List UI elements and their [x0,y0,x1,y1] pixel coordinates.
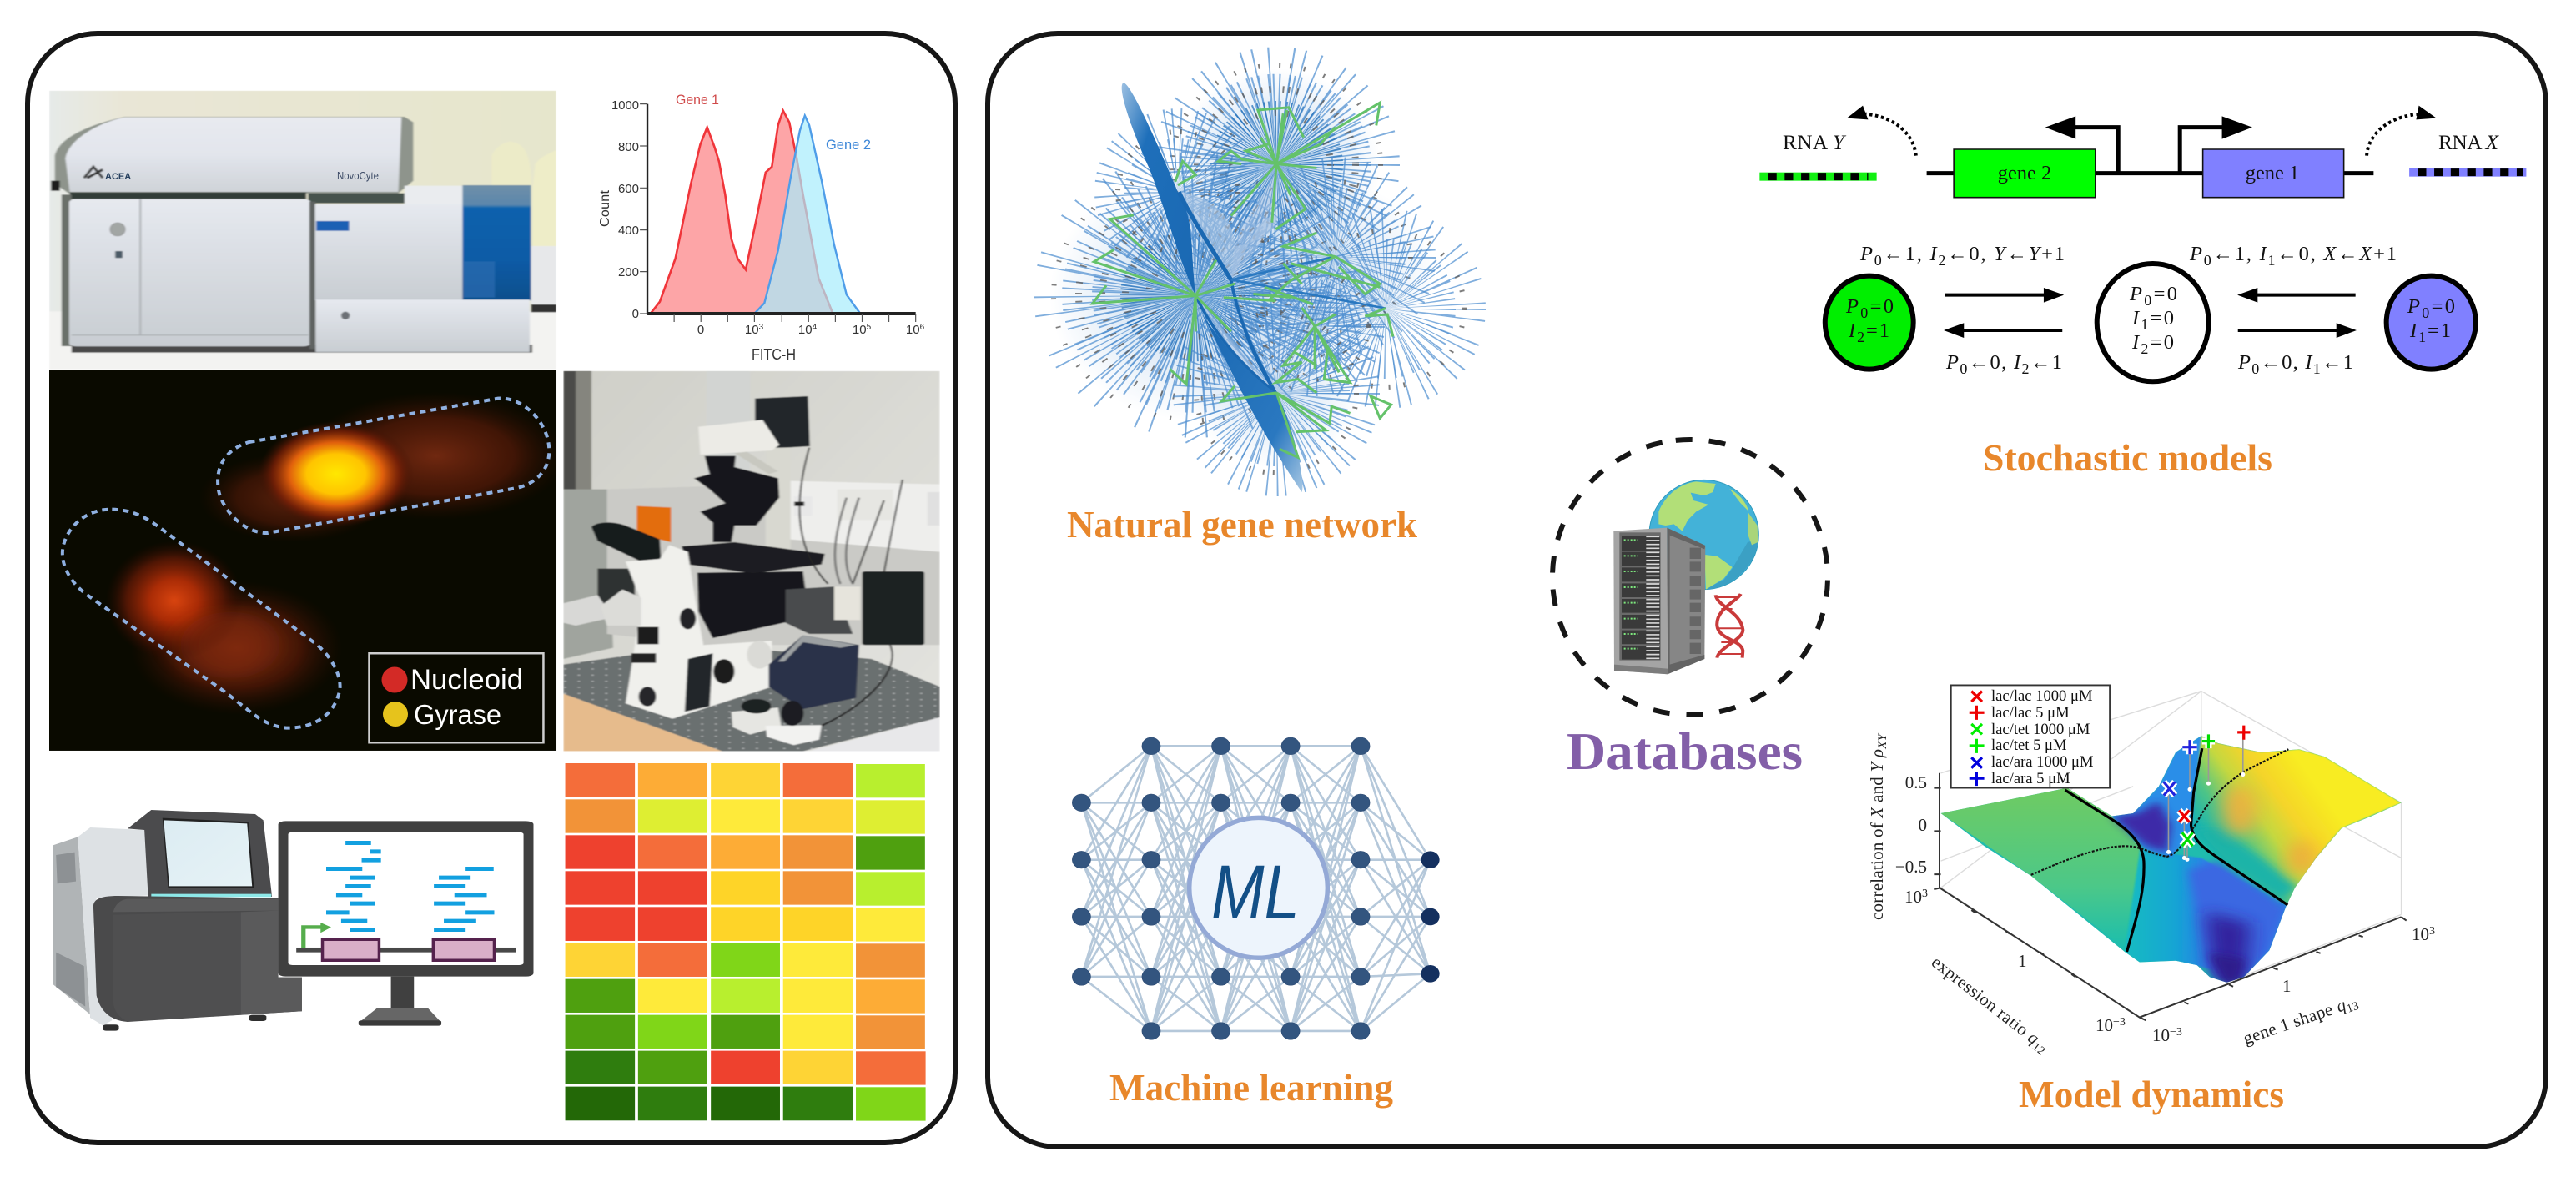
chart: flow cytometry histogram: 6 [920,323,925,332]
chart: natural gene network [1049,65,1464,492]
heading: model dynamics: Model dynamics [2019,1073,2284,1115]
diagram: stochastic gene pair: 0 [2422,304,2429,321]
diagram: stochastic gene pair: 0 [2204,252,2211,269]
chart: 3D correlation surface: 0.5 [1905,772,1927,792]
chart: 3D correlation surface: 12 [2030,1040,2047,1058]
chart: flow cytometry histogram: 3 [759,323,764,332]
diagram: stochastic gene pair: I [2259,243,2268,265]
chart: flow cytometry histogram: FITC-H [752,346,796,363]
diagram: stochastic gene pair: ←0, [1969,351,2013,374]
diagram: stochastic gene pair: gene 1 [2246,162,2299,184]
chart: 3D correlation surface: XY [1876,732,1889,750]
chart: flow cytometry histogram: 400 [618,224,639,238]
photo: inverted microscope [563,371,940,752]
diagram: stochastic gene pair: P [2407,295,2420,318]
chart: flow cytometry histogram: 800 [618,140,639,154]
chart: 3D correlation surface: 1 [2282,976,2291,996]
diagram: stochastic gene pair: RNA X [2438,131,2499,154]
diagram: stochastic gene pair: ←1 [2322,351,2353,374]
diagram: stochastic gene pair: 2 [2022,360,2030,377]
icon: databases globe server and DNA [1539,426,1841,728]
chart: 3D correlation surface: 13 [2345,1000,2361,1016]
diagram: stochastic gene pair: P [2129,283,2142,305]
chart: 3D correlation surface: 10 [1904,887,1922,907]
diagram: neural network [1072,737,1440,1039]
diagram: stochastic gene pair [1759,106,2526,381]
diagram: stochastic gene pair: I [1929,243,1938,265]
diagram: stochastic gene pair: 0 [2251,360,2259,377]
chart: 3D correlation surface: 3 [1922,888,1928,900]
chart: expression heatmap [566,763,926,1121]
chart: 3D correlation surface: lac/ara 5 μM [1991,770,2070,787]
legend: nucleoid and gyrase: Nucleoid [410,664,523,696]
diagram: stochastic gene pair: X←X+1 [2323,243,2397,265]
label: ACEA: ACEA [105,172,131,182]
diagram: stochastic gene pair: RNA Y [1783,131,1847,154]
diagram: stochastic gene pair: ←1 [2030,351,2062,374]
chart: 3D correlation surface: gene 1 shape q [2241,994,2348,1049]
chart: 3D correlation surface: correlation of X and Y ρ [1867,749,1887,920]
chart: flow cytometry histogram: 10 [853,323,867,337]
heading: natural gene network: Natural gene network [1067,503,1417,546]
diagram: stochastic gene pair: 0 [1960,360,1967,377]
diagram: stochastic gene pair: ←1, [1883,243,1929,265]
green interaction edges [1093,103,1393,457]
legend: nucleoid and gyrase [382,664,523,730]
diagram: stochastic gene pair: =0 [2432,295,2455,318]
diagram: stochastic gene pair: P [2189,243,2202,265]
diagram: stochastic gene pair: P [1859,243,1873,265]
chart: flow cytometry histogram: Gene 1 [676,92,719,108]
chart: flow cytometry histogram: Gene 2 [826,137,871,153]
chart: 3D correlation surface: lac/tet 1000 μM [1991,721,2090,738]
diagram: stochastic gene pair: =0 [1870,295,1894,318]
photo: fluorescence micrograph [49,370,566,751]
chart: flow cytometry histogram: 5 [867,323,872,332]
chart: flow cytometry histogram: 10 [906,323,920,337]
diagram: stochastic gene pair: gene 2 [1998,162,2051,184]
diagram: stochastic gene pair: 1 [2141,316,2148,333]
chart: flow cytometry histogram: 10 [745,323,759,337]
diagram: stochastic gene pair: Y←Y+1 [1994,243,2065,265]
chart: 3D correlation surface: −0.5 [1895,857,1927,877]
chart: flow cytometry histogram: 4 [813,323,818,332]
chart: flow cytometry histogram [598,92,925,363]
diagram: stochastic gene pair: 1 [2313,360,2321,377]
chart: flow cytometry histogram: 10 [798,323,813,337]
diagram: stochastic gene pair: I [2409,319,2418,342]
diagram: stochastic gene pair: =1 [2428,319,2451,342]
diagram: stochastic gene pair: 0 [1860,304,1868,321]
blue lens edges [1122,83,1386,492]
diagram: stochastic gene pair: P [1945,351,1959,374]
panel: modelling and data [988,33,2546,1147]
chart: 3D correlation surface: lac/ara 1000 μM [1991,753,2094,771]
diagram: stochastic gene pair: I [2304,351,2313,374]
diagram: stochastic gene pair: 1 [2418,329,2426,345]
chart: 3D correlation surface: lac/tet 5 μM [1991,737,2067,754]
chart: 3D correlation surface: expression ratio q [1928,952,2043,1049]
diagram: stochastic gene pair: ←0, [2277,243,2322,265]
diagram: stochastic gene pair: P [1845,295,1859,318]
diagram: stochastic gene pair: =0 [2151,331,2174,354]
chart: 3D correlation surface: 10 [2152,1025,2170,1045]
diagram: neural network: ML [1211,850,1300,935]
diagram: stochastic gene pair: 2 [1857,329,1864,345]
chart: flow cytometry histogram: 200 [618,265,639,279]
diagram: stochastic gene pair: 1 [2268,252,2276,269]
chart: 3D correlation surface: 0 [1919,815,1927,835]
hub fans [1049,65,1464,473]
heading: machine learning: Machine learning [1109,1066,1393,1109]
diagram: stochastic gene pair: =1 [1866,319,1889,342]
illustration: sequencer and monitor [53,810,533,1031]
diagram: stochastic gene pair: I [2131,307,2141,329]
chart: flow cytometry histogram: 0 [697,323,704,337]
legend: nucleoid and gyrase: Gyrase [414,699,501,730]
chart: flow cytometry histogram: Count [598,189,612,227]
diagram: stochastic gene pair: 0 [1874,252,1882,269]
diagram: stochastic gene pair: I [1848,319,1857,342]
chart: 3D correlation surface: lac/lac 5 μM [1991,704,2070,722]
chart: 3D correlation surface: −3 [2113,1016,2126,1029]
diagram: stochastic gene pair: 2 [2141,340,2148,357]
chart: flow cytometry histogram: 1000 [611,98,639,113]
chart: 3D correlation surface: −3 [2170,1026,2182,1039]
chart: 3D correlation surface: 10 [2096,1015,2113,1035]
heading: stochastic models: Stochastic models [1983,436,2272,479]
chart: 3D correlation surface: 1 [2018,951,2027,971]
diagram: stochastic gene pair: I [2013,351,2022,374]
label: NovoCyte: NovoCyte [337,169,379,182]
diagram: stochastic gene pair: I [2131,331,2141,354]
panel: experimental methods [28,33,955,1143]
heading: databases: Databases [1567,722,1803,781]
diagram: stochastic gene pair: 2 [1938,252,1945,269]
diagram: stochastic gene pair: =0 [2154,283,2177,305]
diagram: stochastic gene pair: ←0, [2260,351,2304,374]
chart: 3D correlation surface [1867,685,2435,1058]
diagram: stochastic gene pair: =0 [2151,307,2174,329]
diagram: stochastic gene pair: ←1, [2213,243,2258,265]
diagram: stochastic gene pair: ←0, [1947,243,1992,265]
diagram: stochastic gene pair: 0 [2144,292,2151,309]
chart: 3D correlation surface: 10 [2412,924,2429,944]
diagram: stochastic gene pair: P [2237,351,2251,374]
photo: flow cytometer [49,91,556,370]
chart: flow cytometry histogram: 0 [632,307,639,321]
chart: 3D correlation surface: lac/lac 1000 μM [1991,687,2092,705]
chart: flow cytometry histogram: 600 [618,182,639,196]
chart: 3D correlation surface: 3 [2429,925,2435,938]
